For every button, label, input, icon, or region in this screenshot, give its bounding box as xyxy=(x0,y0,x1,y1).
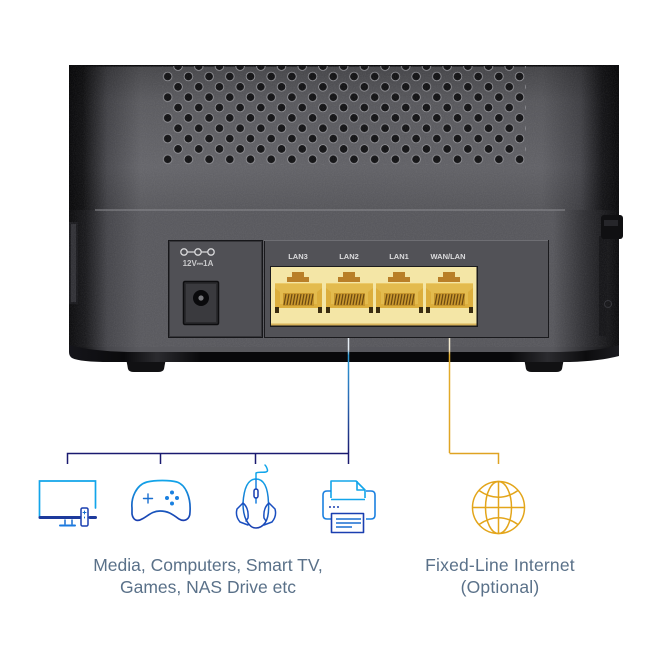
port labels: WAN/LAN xyxy=(430,252,466,261)
power panel xyxy=(168,240,262,338)
upper body xyxy=(69,65,619,211)
router feet xyxy=(126,358,564,372)
vent holes xyxy=(162,66,526,165)
grain texture xyxy=(69,65,619,347)
power socket xyxy=(184,282,218,324)
caption: LAN devices: Games, NAS Drive etc xyxy=(120,577,296,597)
port labels: LAN1 xyxy=(389,252,409,261)
icon: printer xyxy=(323,481,375,532)
voltage label: 12V⎓1A xyxy=(183,259,214,268)
polarity symbol xyxy=(181,249,214,255)
LAN connector lines xyxy=(68,338,348,464)
WAN connector line xyxy=(450,338,498,464)
port labels: LAN2 xyxy=(339,252,359,261)
antenna knob xyxy=(601,215,623,239)
caption: LAN devices xyxy=(93,555,323,597)
lower body xyxy=(69,210,619,353)
bottom black strip xyxy=(69,345,619,362)
icon: globe xyxy=(472,482,524,534)
port LAN2 xyxy=(326,272,373,313)
ports panel xyxy=(264,240,548,338)
port WAN/LAN xyxy=(426,272,473,313)
port LAN1 xyxy=(376,272,423,313)
caption: internet: Fixed-Line Internet xyxy=(425,555,575,575)
caption: LAN devices: Media, Computers, Smart TV, xyxy=(93,555,323,575)
icon: mouse xyxy=(236,465,276,528)
yellow port block xyxy=(270,266,478,327)
port labels xyxy=(288,252,466,261)
port LAN3 xyxy=(275,272,322,313)
router xyxy=(69,65,623,372)
caption: internet: (Optional) xyxy=(461,577,539,597)
port labels: LAN3 xyxy=(288,252,308,261)
icon: smart TV xyxy=(40,481,96,526)
caption: internet xyxy=(425,555,575,597)
icon: game controller xyxy=(132,480,190,520)
